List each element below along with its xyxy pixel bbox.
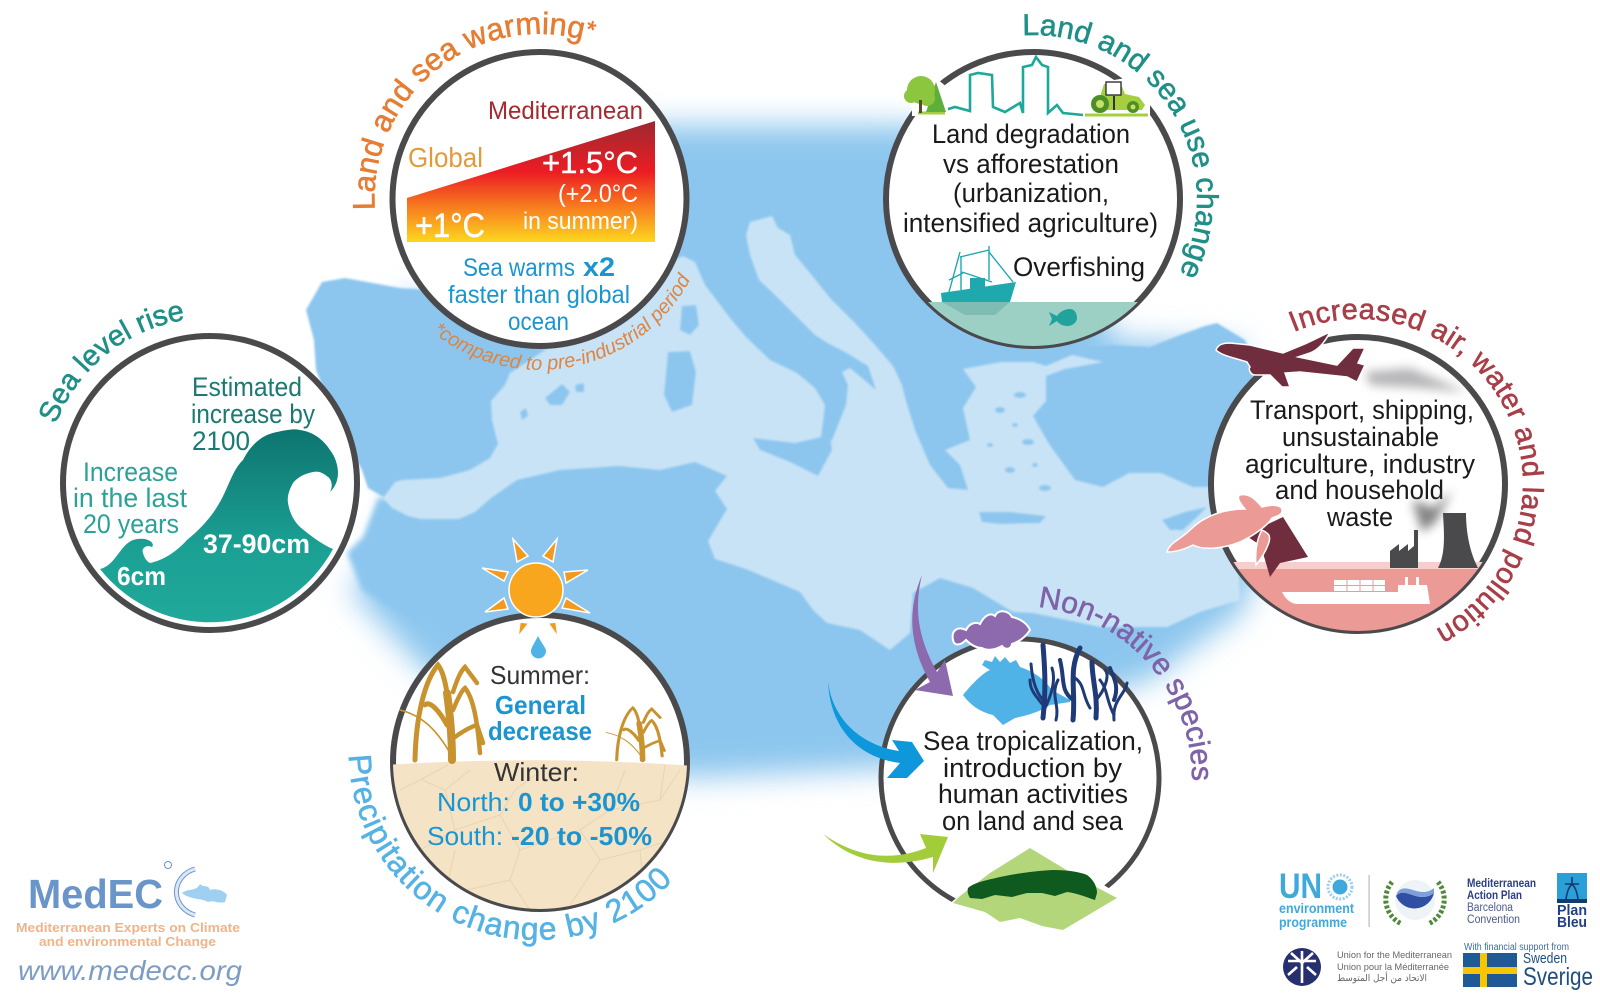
text: land degradation <box>903 119 1158 282</box>
logo: Mediterranean Action Plan: Convention <box>1467 914 1520 926</box>
text: transport: Transport, shipping, <box>1250 395 1474 425</box>
icon: large dry plant <box>400 665 483 760</box>
text: estimated increase: Estimated <box>192 372 302 402</box>
land band and water <box>1234 562 1482 631</box>
text: land degradation: Overfishing <box>1013 252 1145 282</box>
icon: tree <box>902 72 948 116</box>
logo: Mediterranean Action Plan: Mediterranean <box>1467 878 1536 890</box>
soil with cracks <box>385 760 695 915</box>
panel: precipitation change: South: <box>427 821 503 851</box>
heading: pollution: Increased air, water and land pollution <box>1288 303 1544 642</box>
logo: MedECC: www.medecc.org <box>18 955 242 986</box>
temperature wedge chart <box>407 121 655 242</box>
sea warming text: Sea warms <box>463 254 575 282</box>
panel: precipitation change <box>348 536 690 947</box>
icon: leaf with caterpillar <box>945 840 1125 938</box>
text: land degradation: vs afforestation <box>943 149 1119 179</box>
logo: UN environment programme: programme <box>1279 914 1347 930</box>
logo: Mediterranean Action Plan: Barcelona <box>1467 902 1514 914</box>
icon: tractor <box>1085 78 1150 116</box>
logo: Plan Bleu: Bleu <box>1557 914 1587 931</box>
text: estimated increase: increase by <box>191 399 315 429</box>
logo: Union for the Mediterranean: Union for the Mediterranean <box>1337 950 1452 961</box>
panel: land and sea warming: in summer) <box>523 208 638 235</box>
icon: seaweed <box>1030 645 1127 720</box>
factory smoke <box>1412 490 1452 532</box>
panel: land and sea warming: Mediterranean <box>488 97 643 125</box>
icon: small dry plant <box>606 708 664 760</box>
text: sea tropicalization: on land and sea <box>942 806 1124 836</box>
arrow: purple <box>912 575 953 696</box>
plane smoke <box>1365 368 1467 392</box>
panel: land and sea warming: +1.5°C <box>542 145 638 180</box>
heading: precipitation change: Precipitation change by 2100 <box>348 756 670 947</box>
map: Mediterranean basin <box>306 120 1270 778</box>
logo: UN environment programme <box>1279 867 1370 930</box>
text: estimated increase: 2100 <box>192 426 250 456</box>
heading: land and sea use change: Land and sea use change <box>1024 14 1220 277</box>
logo: Plan Bleu <box>1557 873 1587 931</box>
logo: UN environment programme: environment <box>1279 900 1354 916</box>
logo: Sweden: With financial support from <box>1464 942 1569 953</box>
text: transport: waste <box>1326 502 1393 532</box>
logo: Mediterranean Action Plan <box>1386 878 1536 926</box>
panel: land and sea warming: +1°C <box>415 207 485 245</box>
text: estimated increase <box>191 372 315 456</box>
heading: land and sea warming: Land and sea warming <box>352 11 584 208</box>
panel: land and sea use change <box>883 14 1220 349</box>
arrow: blue <box>828 681 924 778</box>
icon: fishing boat <box>941 246 1016 302</box>
text: transport: and household <box>1275 475 1444 505</box>
text: summer: Summer: <box>490 660 590 690</box>
wave graphic <box>100 429 338 622</box>
logo: Plan Bleu: Plan <box>1557 902 1587 919</box>
logo: MedECC: and environmental Change <box>39 934 216 949</box>
panel: land and sea warming <box>352 11 690 374</box>
icon: turtle <box>1167 495 1282 565</box>
panel: sea level rise: 6cm <box>117 561 166 591</box>
sea warming text: x2 <box>583 252 615 282</box>
icon: water drop <box>531 636 546 658</box>
text: winter: Winter: <box>494 757 579 787</box>
logo: MedECC <box>16 862 242 986</box>
icon: purple fish <box>953 611 1030 650</box>
logo: MedECC: Mediterranean Experts on Climate <box>16 920 240 935</box>
text: sea tropicalization: Sea tropicalization, <box>923 726 1143 756</box>
logo: UN environment programme: UN <box>1279 867 1322 906</box>
panel: non-native species <box>823 575 1211 930</box>
icon: cargo ship <box>1282 577 1430 604</box>
icon: blue fish <box>963 656 1070 725</box>
heading: sea level rise: Sea level rise <box>40 306 184 422</box>
text: sea tropicalization <box>923 726 1143 836</box>
panel: precipitation change: North: <box>437 787 510 817</box>
icon: skyline <box>945 57 1083 115</box>
text: transport: unsustainable <box>1282 422 1439 452</box>
icon: factory and cooling tower <box>1390 513 1478 568</box>
text: land degradation: Land degradation <box>932 119 1130 149</box>
sea warming text: ocean <box>508 308 569 336</box>
footnote: *compared to pre-industrial period <box>438 271 690 374</box>
water and fish <box>928 302 1138 346</box>
text: land degradation: intensified agriculture) <box>903 208 1158 238</box>
icon: sun <box>482 539 590 637</box>
logo: MedECC: MedEC <box>28 871 163 917</box>
panel: sea level rise <box>40 306 360 633</box>
logo: Sweden <box>1463 942 1593 991</box>
panel: land and sea warming: (+2.0°C <box>558 180 638 208</box>
panel: land and sea warming: Global <box>408 142 483 173</box>
logo: Sweden: Sweden <box>1523 950 1567 967</box>
panel: increased air, water and land pollution <box>1166 303 1544 642</box>
text: land degradation: (urbanization, <box>953 178 1109 208</box>
text: transport: agriculture, industry <box>1245 449 1475 479</box>
icon: plastic bag <box>1245 517 1308 577</box>
sea warming text <box>448 252 630 336</box>
text: increase last 20 years: in the last <box>73 483 187 513</box>
text: increase last 20 years: 20 years <box>83 509 179 539</box>
heading: land and sea warming: * <box>587 20 596 30</box>
logo: Union for the Mediterranean: الاتحاد من أجل المتوسط <box>1337 971 1427 984</box>
text: transport <box>1245 395 1475 532</box>
text: increase last 20 years <box>73 457 187 539</box>
panel: precipitation change: General <box>495 690 586 720</box>
panel: precipitation change: decrease <box>488 716 592 746</box>
text: increase last 20 years: Increase <box>83 457 178 487</box>
sea warming text: faster than global <box>448 281 630 309</box>
values: 37-90cm <box>203 529 310 559</box>
text: sea tropicalization: human activities <box>938 779 1128 809</box>
logo: Union for the Mediterranean <box>1283 948 1452 986</box>
text: sea tropicalization: introduction by <box>943 753 1123 783</box>
panel: precipitation change: -20 to -50% <box>511 821 652 851</box>
heading: non-native species: Non-native species <box>1040 586 1211 780</box>
icon: plane <box>1216 332 1365 387</box>
logo: Union for the Mediterranean: Union pour la Méditerranée <box>1337 962 1449 973</box>
panel: precipitation change: 0 to +30% <box>518 787 640 817</box>
logo: Mediterranean Action Plan: Action Plan <box>1467 890 1522 902</box>
arrow: green <box>823 834 948 873</box>
